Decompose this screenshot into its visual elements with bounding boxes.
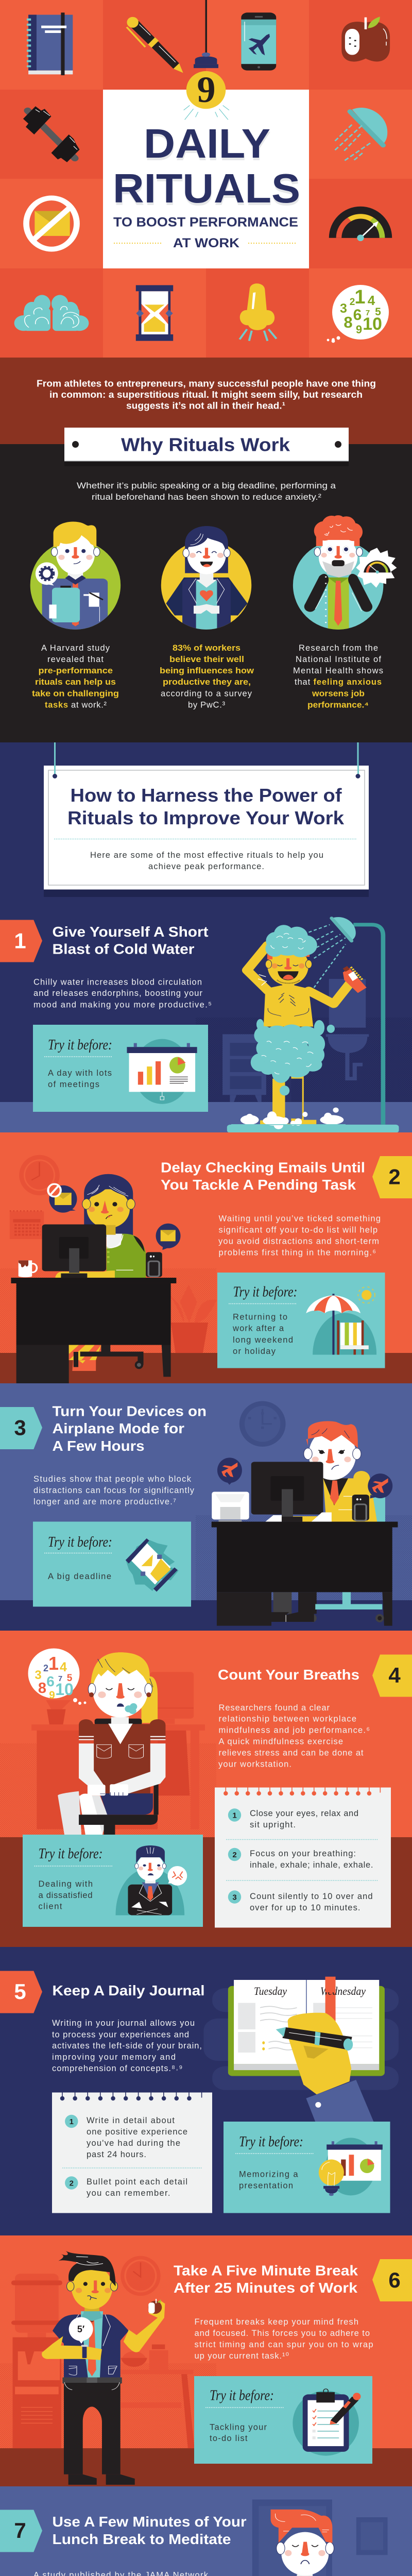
- hanging heading sign: achieve peak performance.: [148, 862, 264, 871]
- icon: hourglass: [136, 285, 173, 341]
- step 2: [228, 1848, 373, 1870]
- section 6: five minute break: [0, 2235, 412, 2486]
- step 3: [228, 1890, 373, 1912]
- title text: RITUALS: [113, 168, 301, 214]
- icon: brain: [14, 295, 89, 331]
- try it before box 5: Try it before:: [239, 2133, 303, 2150]
- try it before box 5: [224, 2122, 390, 2213]
- try it before box 2: or holiday: [233, 1347, 276, 1356]
- column text: NIMH research: that feeling anxious: [295, 677, 382, 687]
- body text 4: A quick mindfulness exercise: [218, 1737, 343, 1747]
- try it before box 4: client: [38, 1902, 62, 1911]
- column text: PwC survey: productive they are,: [163, 677, 251, 687]
- body text 2: you avoid distractions and short-term: [218, 1236, 379, 1246]
- day labels: Wednesday: [320, 1985, 366, 1997]
- heading 1: Give Yourself A Short: [53, 924, 208, 940]
- intro sentence: [77, 481, 336, 502]
- step 2: you can remember.: [87, 2189, 170, 2198]
- section 7: meditate: [0, 2486, 412, 2576]
- body text 5: activates the left-side of your brain,: [52, 2041, 202, 2050]
- step 2: Focus on your breathing:: [250, 1849, 356, 1858]
- try it before box 3: Try it before:: [48, 1534, 112, 1550]
- body text 6: Frequent breaks keep your mind fresh: [195, 2317, 358, 2327]
- section: why rituals work: [0, 428, 412, 709]
- heading 2: Delay Checking Emails Until: [161, 1159, 365, 1176]
- body text 5: [52, 2019, 202, 2073]
- heading 3: A Few Hours: [53, 1438, 144, 1454]
- heading 4: Count Your Breaths: [218, 1667, 359, 1683]
- section 4: count your breaths: [0, 1631, 412, 1947]
- try it before box 2: [217, 1273, 385, 1368]
- title text: DAILY: [144, 123, 271, 169]
- body text 4: [218, 1703, 370, 1769]
- step 3: Count silently to 10 over and: [250, 1892, 373, 1901]
- hanging heading sign: Rituals to Improve Your Work: [67, 807, 345, 828]
- day labels: Tuesday: [254, 1985, 287, 1997]
- column text: NIMH research: [293, 643, 383, 710]
- body text 2: significant off your to-do list will help: [218, 1225, 377, 1234]
- try it before box 1: A day with lots: [48, 1069, 112, 1078]
- icon: idea bulb and chart: [319, 2138, 383, 2196]
- icon: notebook: [28, 12, 73, 75]
- title panel: [103, 90, 309, 268]
- hanging light bulb with 9: [184, 0, 229, 120]
- figure: woman counting breaths: [58, 1652, 165, 1835]
- heading 5: Keep A Daily Journal: [53, 1982, 205, 1998]
- intro sentence: Whether it’s public speaking or a big deadline, performing a: [77, 481, 336, 490]
- try it before box 4: Try it before:: [38, 1845, 103, 1862]
- step 2: 2: [70, 2179, 74, 2188]
- hanging light bulb with 9: 9: [197, 69, 215, 110]
- column text: PwC survey: being influences how: [160, 666, 254, 675]
- figure: man checking watch: [42, 2251, 165, 2485]
- figure: man meditating: [205, 2510, 405, 2576]
- title text: DAILY: [144, 121, 270, 166]
- title text: TO BOOST PERFORMANCE: [113, 215, 298, 230]
- body text 2: Waiting until you’ve ticked something: [218, 1214, 381, 1223]
- body text 1: Chilly water increases blood circulation: [33, 978, 202, 987]
- heading 7: [53, 2514, 247, 2547]
- try it before box 2: Returning to: [233, 1313, 287, 1322]
- steps note 4: [215, 1788, 391, 1928]
- body text 5: to process your experiences and: [52, 2030, 189, 2039]
- column text: Harvard study: rituals can help us: [35, 677, 116, 687]
- try it before box 1: Try it before:: [48, 1037, 112, 1053]
- number tab 7: 7: [14, 2518, 26, 2543]
- figure: man showering: [231, 925, 367, 1129]
- body text 4: mindfulness and job performance.⁶: [218, 1726, 370, 1735]
- step 3: 3: [232, 1893, 237, 1902]
- body text 3: distractions can focus for significantly: [33, 1486, 195, 1495]
- column text: Harvard study: tasks at work.²: [45, 701, 107, 710]
- icon: numbers thought bubble: 4: [368, 293, 375, 308]
- body text 4: your workstation.: [218, 1760, 291, 1769]
- heading 6: [174, 2263, 358, 2296]
- try it before box 6: Try it before:: [210, 2387, 274, 2404]
- body text 3: Studies show that people who block: [33, 1475, 192, 1484]
- step 2: 2: [232, 1851, 237, 1859]
- intro sentence: ritual beforehand has been shown to reduce anxiety.²: [92, 493, 322, 502]
- step 1: one positive experience: [87, 2127, 187, 2137]
- body text 2: problems first thing in the morning.⁶: [218, 1248, 376, 1257]
- heading 7: Lunch Break to Meditate: [53, 2531, 231, 2547]
- thought bubble with numbers: 7: [58, 1674, 62, 1683]
- step 1: past 24 hours.: [87, 2150, 146, 2159]
- body text 4: Researchers found a clear: [218, 1703, 330, 1713]
- icon: numbers thought bubble: 7: [366, 309, 370, 317]
- try it before box 4: Dealing with: [38, 1879, 93, 1889]
- step 3: over for up to 10 minutes.: [250, 1903, 360, 1912]
- column text: PwC survey: 83% of workers: [173, 643, 241, 653]
- body text 4: relationship between workplace: [218, 1715, 356, 1724]
- column text: Harvard study: A Harvard study: [41, 643, 110, 653]
- figure: happy worker: [161, 526, 251, 631]
- number tab 1: 1: [14, 928, 26, 953]
- icon: numbers thought bubble: 3: [340, 301, 347, 316]
- heading 3: Turn Your Devices on: [53, 1403, 207, 1419]
- office background: [11, 2256, 195, 2448]
- number tab 3: 3: [14, 1416, 26, 1439]
- icon: numbers thought bubble: 8: [344, 313, 353, 331]
- column text: PwC survey: according to a survey: [161, 689, 252, 699]
- shower and tub: [227, 917, 399, 1133]
- step 2: [65, 2176, 187, 2198]
- number tab 7: [0, 2510, 42, 2552]
- step 2: inhale, exhale; inhale, exhale.: [250, 1860, 373, 1870]
- figure: worker with clipboard: [30, 521, 121, 631]
- icon: numbers thought bubble: 2: [350, 297, 355, 308]
- step 1: Close your eyes, relax and: [250, 1809, 358, 1818]
- heading 2: [161, 1159, 365, 1193]
- icon: performance gauge: [329, 207, 392, 241]
- body text 4: relieves stress and can be done at: [218, 1749, 364, 1758]
- heading 6: After 25 Minutes of Work: [174, 2280, 358, 2296]
- column text: NIMH research: Mental Health shows: [293, 666, 383, 675]
- try it before box 4: [23, 1835, 203, 1927]
- icon: numbers thought bubble: 5: [375, 306, 381, 318]
- title text: AT WORK: [173, 236, 239, 250]
- column text: NIMH research: performance.⁴: [307, 701, 369, 710]
- thought bubble with numbers: 6: [46, 1673, 55, 1689]
- room background: [252, 2499, 404, 2576]
- heading 1: Blast of Cold Water: [53, 941, 195, 957]
- intro panel: [0, 358, 412, 445]
- body text 1: [33, 978, 212, 1010]
- heading 7: Use A Few Minutes of Your: [53, 2514, 247, 2530]
- try it before box 3: [33, 1522, 191, 1606]
- section 1: cold water: [0, 742, 412, 1133]
- office background: [31, 1672, 205, 1829]
- thought bubble with numbers: 3: [35, 1668, 42, 1682]
- wall clock and calendar: [10, 1155, 60, 1239]
- try it before box 6: Tackling your: [210, 2422, 267, 2432]
- icon: numbers thought bubble: 1: [354, 286, 366, 308]
- thought bubble with numbers: [28, 1649, 87, 1705]
- thought bubble with numbers: 10: [55, 1680, 74, 1699]
- intro text: suggests it’s not all in their head.¹: [126, 400, 285, 411]
- icon: numbers thought bubble: [327, 285, 389, 343]
- number tab 6: 6: [388, 2268, 401, 2292]
- thought bubble with numbers: 1: [48, 1653, 59, 1674]
- step 1: sit upright.: [250, 1820, 296, 1829]
- heading 6: Take A Five Minute Break: [174, 2263, 358, 2278]
- thought bubble with numbers: 5: [67, 1673, 73, 1684]
- step 2: Bullet point each detail: [87, 2177, 187, 2187]
- thought bubble with numbers: 8: [38, 1680, 46, 1697]
- column text: PwC survey: believe their well: [169, 655, 244, 664]
- try it before box 1: [33, 1025, 208, 1112]
- number tab 5: 5: [14, 1979, 26, 2004]
- try it before box 4: a dissatisfied: [38, 1891, 93, 1900]
- column text: Harvard study: pre-performance: [38, 666, 113, 675]
- section 3: airplane mode: [0, 1383, 412, 1631]
- body text 5: comprehension of concepts.⁸˒⁹: [52, 2064, 182, 2073]
- try it before box 6: [194, 2376, 372, 2464]
- step 1: [228, 1808, 358, 1829]
- thought bubble with numbers: 9: [49, 1689, 55, 1701]
- intro text: From athletes to entrepreneurs, many successful people have one thing: [37, 378, 376, 388]
- body text 6: [195, 2317, 373, 2361]
- try it before box 2: work after a: [232, 1324, 284, 1333]
- column text: NIMH research: worsens job: [312, 689, 365, 699]
- icon: numbers thought bubble: 10: [363, 314, 382, 334]
- icon: pen: [127, 17, 183, 73]
- icon: angry client: [115, 1845, 187, 1916]
- stopwatch label: 5′: [77, 2324, 84, 2334]
- body text 5: improving your memory and: [52, 2053, 176, 2062]
- heading plaque: [64, 428, 349, 466]
- body text 3: longer and are more productive.⁷: [33, 1497, 176, 1506]
- step 1: you've had during the: [87, 2139, 180, 2148]
- number tab 6: [372, 2259, 412, 2301]
- body text 2: [218, 1214, 381, 1257]
- icon: beach umbrella and deck chair: [306, 1287, 376, 1354]
- title text: [113, 121, 301, 250]
- heading 2: You Tackle A Pending Task: [161, 1177, 356, 1193]
- number tab 2: [372, 1156, 412, 1198]
- column text: Harvard study: [32, 643, 119, 710]
- heading 3: [53, 1403, 207, 1454]
- try it before box 3: A big deadline: [48, 1572, 111, 1581]
- icon: numbers thought bubble: 6: [353, 307, 362, 324]
- steps note 5: [52, 2093, 212, 2213]
- day labels: [254, 1977, 366, 1997]
- number tab 4: [372, 1655, 412, 1697]
- icon: phone in airplane mode: [241, 12, 276, 71]
- figure: man at desk with phone: [212, 1401, 398, 1626]
- body text 1: and releases endorphins, boosting your: [33, 989, 203, 998]
- try it before box 2: long weekend: [233, 1335, 293, 1345]
- icon: presentation board: [127, 1039, 197, 1104]
- try it before box 6: to-do list: [210, 2434, 248, 2443]
- try it before box 5: Memorizing a: [239, 2170, 298, 2179]
- column text: PwC survey: by PwC.³: [188, 701, 226, 710]
- body text 1: mood and making you more productive.⁵: [33, 1001, 212, 1010]
- number tab 3: [0, 1407, 42, 1449]
- section 2: delay emails: [0, 1132, 412, 1395]
- column text: Harvard study: take on challenging: [32, 689, 119, 699]
- icon: dumbbell: [23, 106, 80, 162]
- hanging heading sign: [44, 742, 369, 897]
- try it before box 1: of meetings: [48, 1080, 99, 1089]
- step 1: [65, 2115, 187, 2159]
- icon: no email: [26, 198, 77, 249]
- hero section: [0, 0, 412, 358]
- thought bubble with numbers: 2: [43, 1663, 48, 1673]
- number tab 5: [0, 1971, 42, 2013]
- column text: PwC survey: [160, 643, 254, 710]
- column text: NIMH research: Research from the: [299, 643, 378, 653]
- icon: numbers thought bubble: 9: [356, 323, 362, 336]
- intro text: in common: a superstitious ritual. It might seem silly, but research: [49, 389, 363, 400]
- number tab 2: 2: [388, 1164, 401, 1189]
- icon: shower head: [335, 108, 387, 160]
- title text: RITUALS: [113, 165, 300, 211]
- section 5: daily journal: [0, 1947, 412, 2235]
- heading 3: Airplane Mode for: [53, 1420, 184, 1436]
- figure: woman at desk: [11, 1174, 181, 1395]
- figure: anxious worker: [293, 515, 397, 631]
- body text 6: and focused. This forces you to adhere to: [195, 2329, 370, 2338]
- number tab 4: 4: [388, 1663, 401, 1687]
- hanging heading sign: Here are some of the most effective rituals to help you: [90, 851, 323, 860]
- hanging heading sign: How to Harness the Power of: [70, 785, 342, 806]
- icon: tilted hourglass: [126, 1538, 179, 1592]
- body text 5: Writing in your journal allows you: [52, 2019, 195, 2028]
- icon: apple: [341, 16, 390, 62]
- icon: nose: [239, 283, 277, 341]
- thought bubble with numbers: 4: [60, 1660, 67, 1674]
- bathroom background: [222, 979, 369, 1102]
- title text: TO BOOST PERFORMANCE: [113, 216, 298, 230]
- heading plaque: Why Rituals Work: [121, 434, 290, 455]
- body text 6: strict timing and can spur you on to wrap: [195, 2340, 373, 2349]
- plant: [168, 1284, 217, 1353]
- number tab 1: [0, 920, 42, 962]
- heading 1: [53, 924, 208, 957]
- try it before box 2: Try it before:: [233, 1284, 298, 1300]
- try it before box 5: presentation: [239, 2181, 293, 2191]
- column text: NIMH research: National Institute of: [296, 655, 381, 664]
- column text: Harvard study: revealed that: [47, 655, 104, 664]
- step 1: 1: [232, 1811, 237, 1820]
- step 1: 1: [70, 2117, 74, 2126]
- icon: to-do clipboard: [293, 2389, 361, 2455]
- step 1: Write in detail about: [87, 2116, 175, 2125]
- figure: hand writing in journal: [203, 1977, 399, 2122]
- intro text: [37, 378, 376, 411]
- body text 3: [33, 1475, 195, 1506]
- body text 6: up your current task.¹⁰: [195, 2351, 289, 2361]
